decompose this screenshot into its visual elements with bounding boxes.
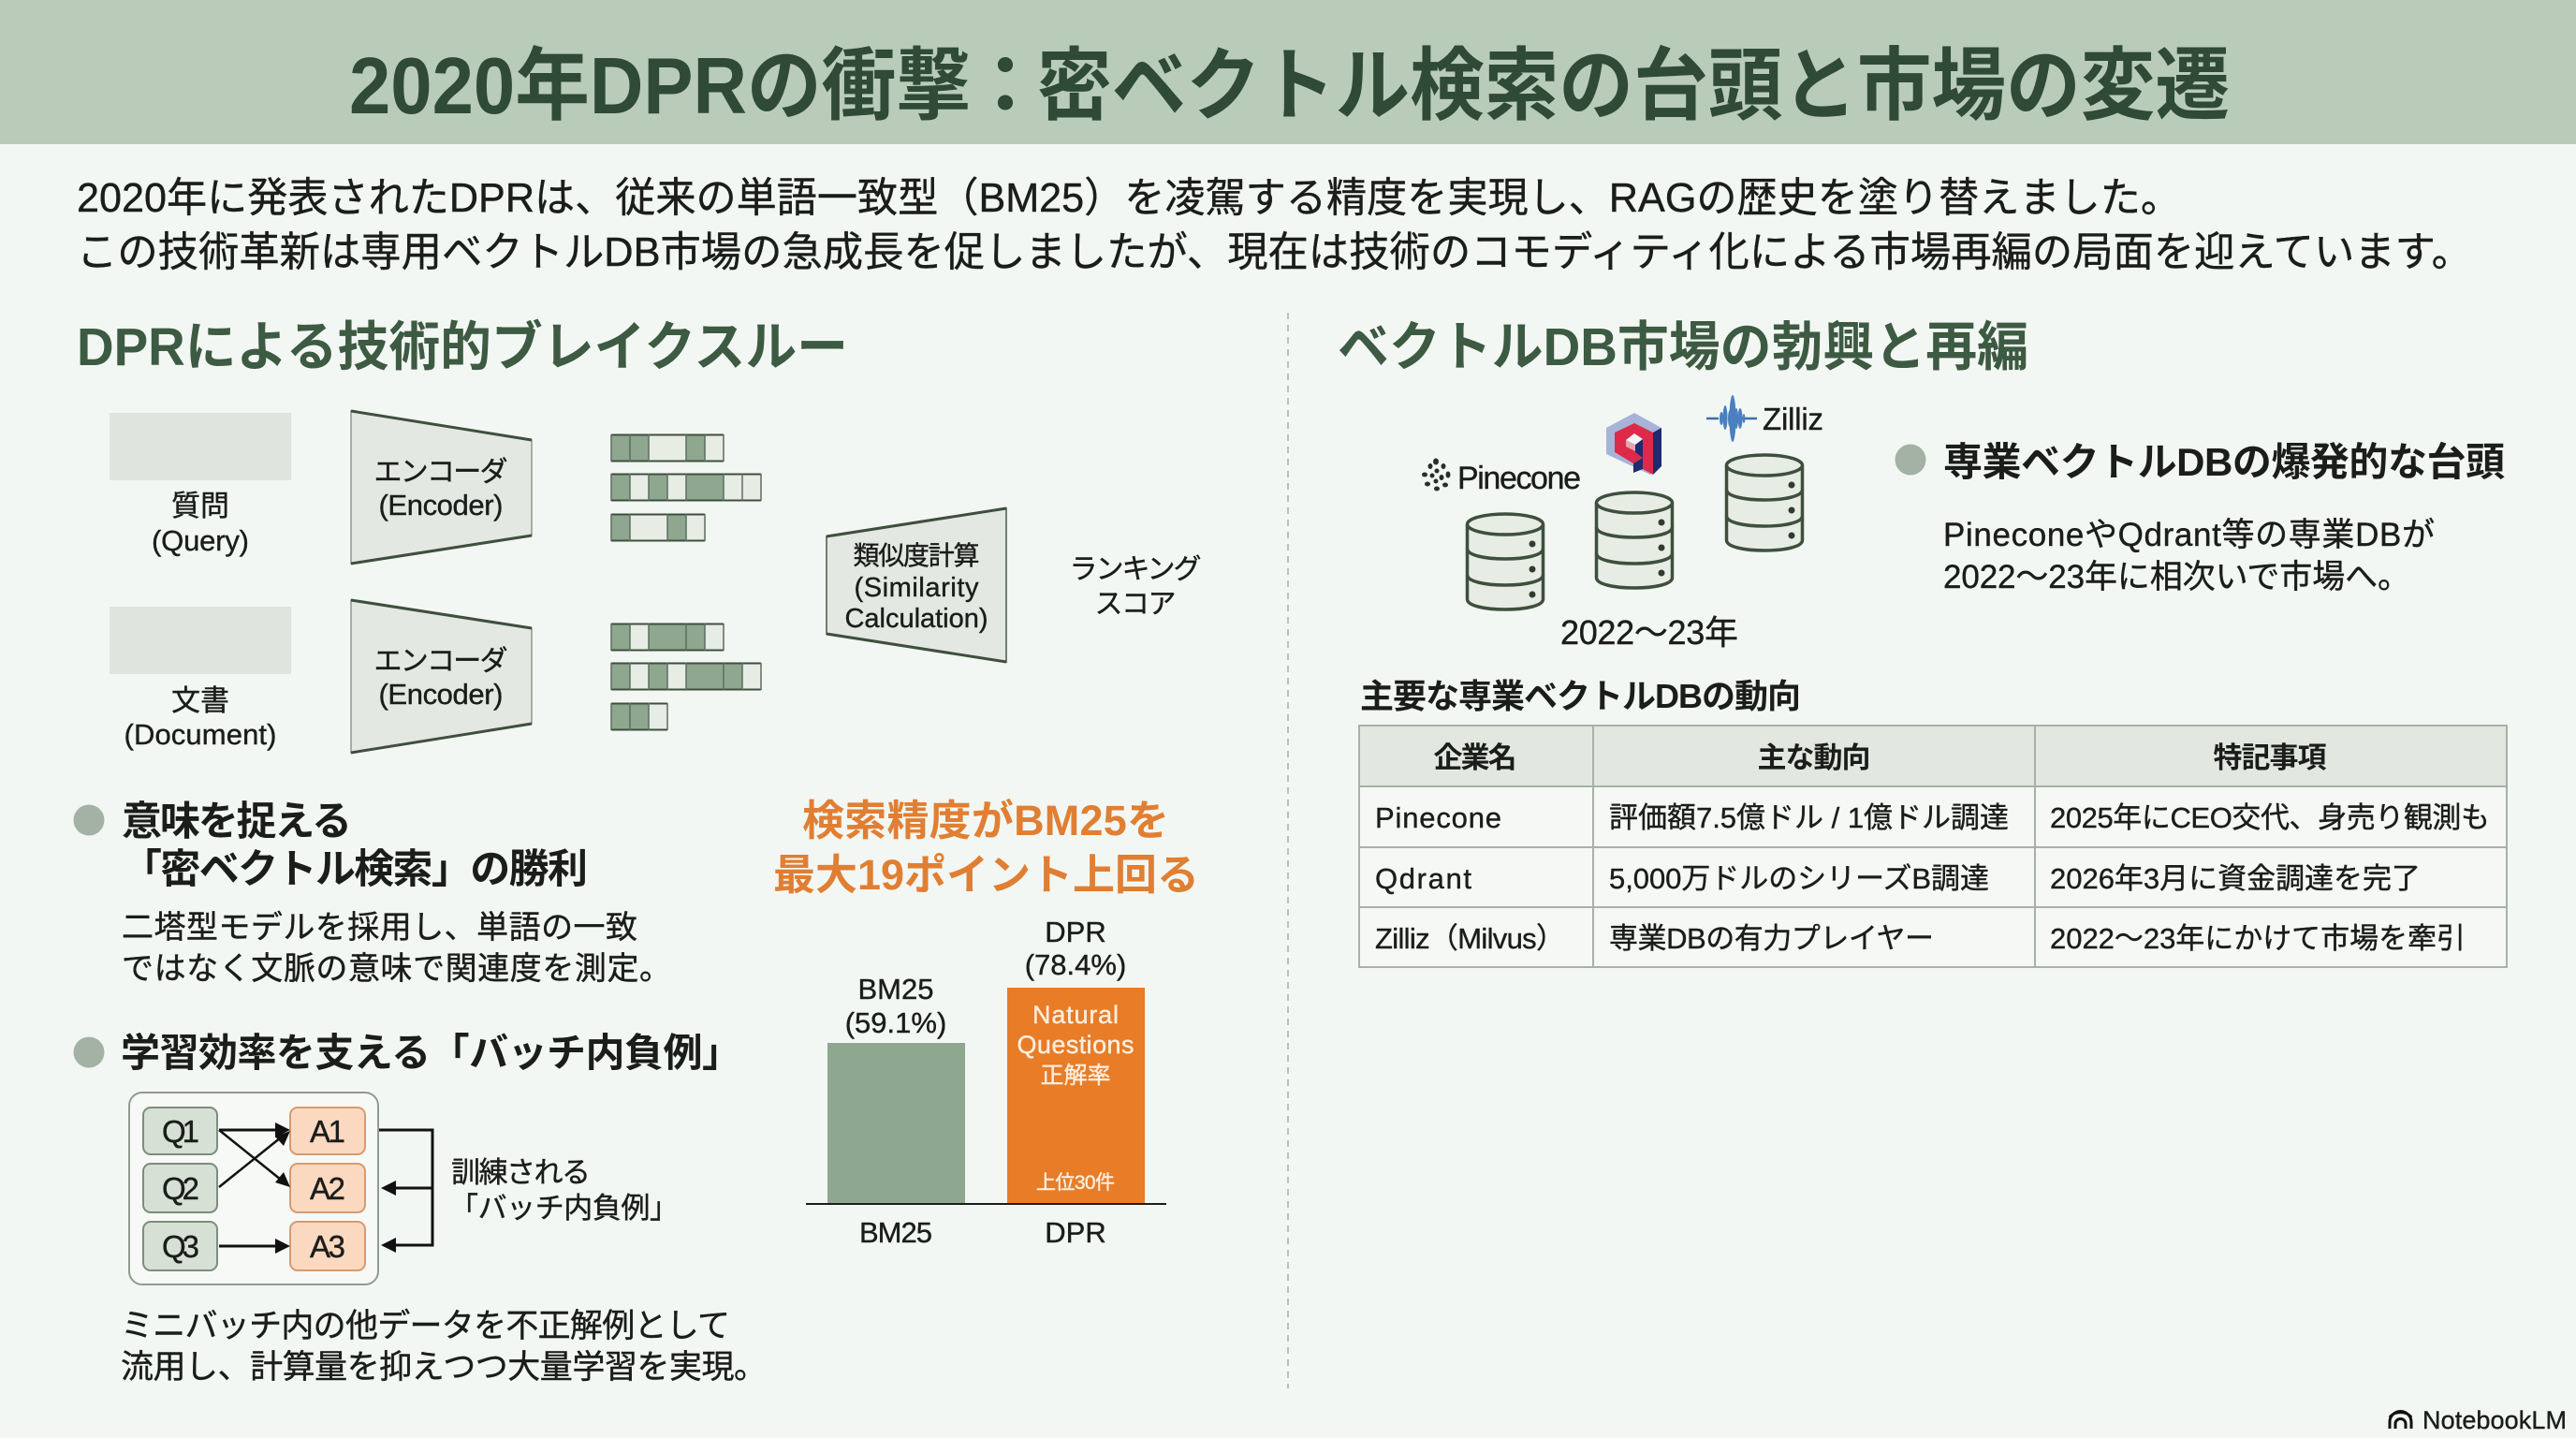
query vectors	[611, 434, 761, 541]
bar: BM25: (59.1%)	[845, 1006, 946, 1039]
bar: DPR: Natural	[1032, 1001, 1119, 1029]
bar: BM25: BM25	[859, 1216, 932, 1249]
query input: (Query)	[152, 524, 249, 557]
label: batch negatives: 訓練される	[451, 1156, 591, 1189]
similarity calculation: 類似度計算	[854, 541, 979, 570]
table row: Zilliz: 2022〜23年にかけて市場を牽引	[2050, 922, 2466, 955]
bar: DPR: DPR	[1045, 916, 1106, 948]
batch description	[121, 1308, 767, 1386]
bullet: rise of dedicated DBs: PineconeやQdrant等の専業DBが	[1943, 517, 2435, 553]
database illustration	[1422, 395, 1823, 652]
year label: 2022〜23年	[1560, 613, 1738, 652]
question boxes	[143, 1108, 217, 1270]
title banner: 2020年DPRの衝撃	[349, 42, 971, 131]
similarity calculation: (Similarity	[854, 573, 979, 603]
batch description: 流用し、計算量を抑えつつ大量学習を実現。	[121, 1349, 767, 1386]
bar: BM25	[827, 973, 965, 1249]
bullet: batch negatives: 学習効率を支える「バッチ内負例」	[121, 1031, 741, 1075]
batch negatives diagram	[129, 1093, 679, 1284]
bar: DPR: 上位30件	[1036, 1172, 1115, 1194]
document input: 文書	[171, 684, 229, 717]
query input	[110, 413, 291, 557]
answer boxes: A3	[310, 1229, 345, 1264]
panel: vector DB market	[1338, 317, 2507, 967]
logo: Qdrant	[1606, 413, 1661, 475]
ranking score: スコア	[1095, 589, 1176, 620]
document input	[110, 607, 291, 751]
answer boxes: A1	[310, 1114, 345, 1149]
bullet: dense vector search: ではなく文脈の意味で関連度を測定。	[122, 951, 671, 987]
logo: Zilliz: Zilliz	[1763, 402, 1823, 436]
bar: BM25: BM25	[858, 973, 933, 1005]
bar: DPR: Questions	[1017, 1031, 1134, 1059]
table row: Qdrant: Qdrant	[1375, 862, 1471, 895]
title banner	[0, 0, 2576, 144]
ranking score: ランキング	[1069, 554, 1202, 585]
bar: DPR: 正解率	[1040, 1063, 1111, 1089]
question boxes: Q3	[162, 1229, 199, 1264]
similarity calculation: Calculation)	[844, 604, 988, 634]
intro text: 2020年に発表されたDPRは、従来の単語一致型（BM25）を凌駕する精度を実現し、RAGの歴史を塗り替えました。	[77, 175, 2181, 221]
query input: 質問	[171, 490, 229, 522]
table row: Qdrant: 5,000万ドルのシリーズB調達	[1609, 862, 1989, 895]
document encoder: エンコーダ	[374, 646, 507, 677]
bullet: rise of dedicated DBs: 専業ベクトルDBの爆発的な台頭	[1943, 440, 2505, 484]
question boxes: Q1	[162, 1114, 199, 1149]
bar: DPR: DPR	[1045, 1216, 1106, 1249]
table row: Qdrant	[1375, 862, 2421, 895]
document vectors	[611, 624, 761, 730]
callout: accuracy	[773, 797, 1199, 899]
label: batch negatives	[449, 1156, 679, 1225]
query encoder: エンコーダ	[374, 457, 507, 488]
document input: (Document)	[124, 718, 277, 751]
document encoder: (Encoder)	[378, 678, 504, 711]
bullet: dense vector search: 二塔型モデルを採用し、単語の一致	[122, 910, 637, 946]
heading: market: ベクトルDB市場の勃興と再編	[1338, 317, 2028, 377]
document encoder	[351, 600, 532, 753]
table row: Pinecone: Pinecone	[1375, 801, 1501, 834]
table header: 主な動向	[1758, 741, 1870, 774]
callout: accuracy: 最大19ポイント上回る	[773, 851, 1199, 899]
ranking score	[1069, 554, 1202, 620]
table: vector DB trends	[1359, 726, 2507, 967]
table heading: 主要な専業ベクトルDBの動向	[1360, 677, 1801, 715]
table header: 企業名	[1434, 741, 1516, 774]
table header	[1434, 741, 2327, 774]
query encoder: (Encoder)	[378, 489, 504, 521]
similarity calculation	[827, 508, 1006, 662]
answer boxes	[290, 1108, 365, 1270]
icon: database Zilliz	[1726, 455, 1803, 550]
logo: Pinecone: Pinecone	[1457, 461, 1581, 496]
label: batch negatives: 「バッチ内負例」	[449, 1192, 679, 1225]
arrows	[219, 1123, 432, 1254]
panel: DPR technical breakthrough	[73, 317, 1202, 1386]
bar chart	[806, 916, 1166, 1249]
batch description: ミニバッチ内の他データを不正解例として	[121, 1308, 730, 1344]
two-tower diagram	[110, 411, 1202, 753]
table row: Zilliz: Zilliz（Milvus）	[1375, 922, 1565, 955]
icon: database Pinecone	[1468, 514, 1543, 609]
callout: accuracy: 検索精度がBM25を	[802, 797, 1169, 844]
bullet: dense vector search: 「密ベクトル検索」の勝利	[122, 847, 588, 892]
table row: Zilliz	[1375, 922, 2466, 955]
table row: Pinecone	[1375, 801, 2490, 834]
answer boxes: A2	[310, 1171, 345, 1206]
logo: Zilliz	[1706, 395, 1823, 442]
bullet: rise of dedicated DBs: 2022〜23年に相次いで市場へ。	[1943, 559, 2410, 595]
table header: 特記事項	[2213, 741, 2327, 774]
bullet: dense vector search: 意味を捉える	[122, 800, 352, 844]
table row: Zilliz: 専業DBの有力プレイヤー	[1609, 922, 1934, 955]
table row: Pinecone: 2025年にCEO交代、身売り観測も	[2050, 801, 2490, 834]
title banner: ：	[965, 42, 1046, 131]
icon: database Qdrant	[1597, 492, 1672, 588]
bullet: dense vector search	[73, 800, 671, 987]
table row: Pinecone: 評価額7.5億ドル / 1億ドル調達	[1609, 801, 2009, 834]
heading: DPR: DPRによる技術的ブレイクスルー	[77, 317, 848, 377]
bar: DPR	[1007, 916, 1145, 1249]
table row: Qdrant: 2026年3月に資金調達を完了	[2050, 862, 2421, 895]
intro text	[77, 175, 2472, 275]
logo: NotebookLM: NotebookLM	[2422, 1406, 2567, 1434]
query encoder	[351, 411, 532, 564]
intro text: この技術革新は専用ベクトルDB市場の急成長を促しましたが、現在は技術のコモディティ化による市場再編の局面を迎えています。	[77, 229, 2472, 275]
question boxes: Q2	[162, 1171, 199, 1206]
title banner: 密ベクトル検索の台頭と市場の変遷	[1037, 42, 2230, 131]
bullet: rise of dedicated DBs	[1895, 440, 2505, 595]
bar: DPR: (78.4%)	[1025, 948, 1126, 981]
